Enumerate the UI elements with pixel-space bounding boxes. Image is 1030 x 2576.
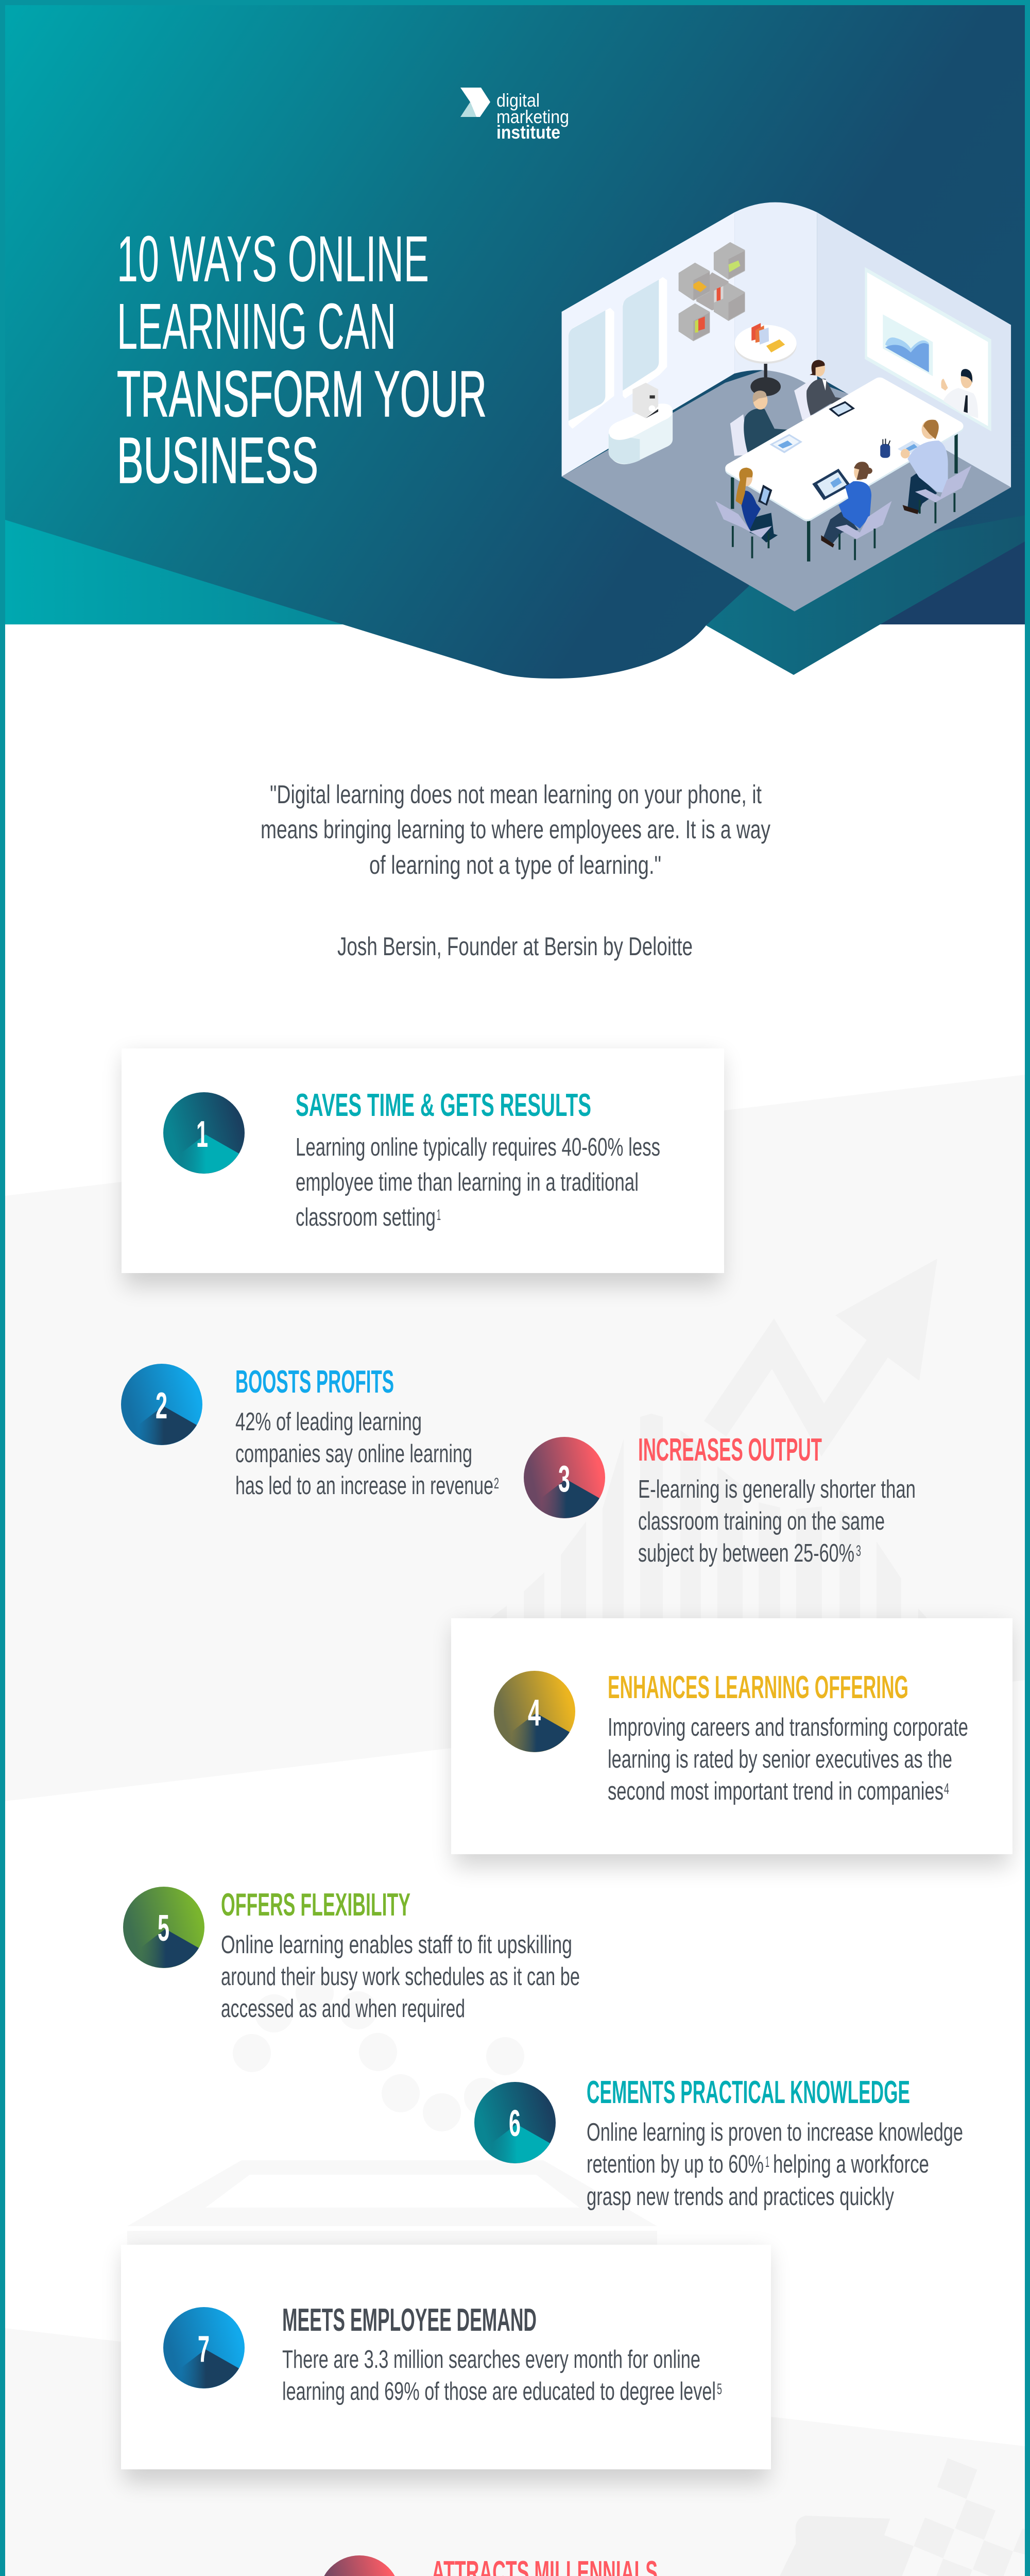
person: man in blue	[821, 462, 872, 548]
number badge 6	[474, 2082, 556, 2163]
quote: "Digital learning does not mean learning on your phone, it	[270, 780, 762, 809]
chair on the right	[915, 466, 972, 523]
item: 5 offers flexibility	[123, 1887, 580, 2023]
number badge 3	[524, 1437, 605, 1518]
hero background	[5, 5, 1025, 679]
text 7	[282, 2346, 722, 2405]
text 5	[221, 1931, 580, 2023]
wall shelves	[679, 242, 745, 341]
text 2: has led to an increase in revenue	[235, 1472, 493, 1500]
text 3	[638, 1476, 916, 1567]
number badge 7: 7	[198, 2329, 210, 2370]
text 3: subject by between 25-60%	[638, 1539, 854, 1567]
text 1: employee time than learning in a traditional	[296, 1168, 639, 1196]
title: TRANSFORM YOUR	[117, 358, 487, 430]
panel: 1 saves time	[122, 1048, 724, 1286]
text 2: companies say online learning	[235, 1440, 472, 1468]
background band: lower	[5, 2328, 1025, 2576]
large tablet	[812, 469, 851, 500]
text 6: grasp new trends and practices quickly	[587, 2183, 894, 2211]
quote: means bringing learning to where employees are. It is a way	[261, 815, 770, 844]
text 1	[296, 1133, 660, 1231]
text 4: 4	[944, 1781, 949, 1798]
room shell	[562, 202, 1011, 612]
text 7: There are 3.3 million searches every month for online	[282, 2346, 700, 2374]
logo: header: institute	[496, 122, 560, 143]
number badge 1	[163, 1092, 245, 1174]
quote	[261, 780, 770, 961]
number badge 2: 2	[156, 1385, 167, 1427]
quote: of learning not a type of learning."	[369, 851, 661, 879]
number badge 8	[319, 2555, 400, 2576]
person: woman in front	[736, 468, 778, 543]
text 2: 2	[494, 1475, 499, 1492]
text 2	[235, 1408, 499, 1500]
heading 3: INCREASES OUTPUT	[638, 1432, 822, 1468]
logo: header	[460, 88, 569, 143]
windows	[569, 277, 667, 429]
meeting table	[732, 383, 957, 516]
text 1: 1	[437, 1207, 441, 1224]
text 5: around their busy work schedules as it can be	[221, 1963, 580, 1991]
back table legs	[731, 434, 958, 562]
person: man on the right	[901, 420, 948, 514]
title: LEARNING CAN	[117, 290, 396, 363]
text 7: learning and 69% of those are educated to degree level	[282, 2378, 716, 2405]
number badge 4: 4	[528, 1692, 541, 1734]
panel: 7 meets employee demand	[121, 2245, 771, 2482]
item: 2 boosts profits	[121, 1364, 499, 1500]
text 6: 1	[765, 2154, 769, 2171]
heading 5: OFFERS FLEXIBILITY	[221, 1887, 410, 1923]
text 5: accessed as and when required	[221, 1995, 465, 2023]
chair front left	[715, 501, 772, 558]
quote: Josh Bersin, Founder at Bersin by Deloitte	[337, 932, 693, 961]
number badge 3: 3	[558, 1459, 570, 1500]
text 1: classroom setting	[296, 1204, 436, 1231]
background band: top	[5, 1075, 1025, 1801]
text 3: E-learning is generally shorter than	[638, 1476, 916, 1503]
text 5: Online learning enables staff to fit upskilling	[221, 1931, 572, 1959]
illustration: isometric meeting room	[562, 202, 1011, 612]
text 3: classroom training on the same	[638, 1507, 885, 1535]
logo: header: digital	[496, 90, 540, 111]
item: 3 increases output	[524, 1432, 916, 1567]
logo: header: marketing	[496, 106, 569, 127]
heading 2: BOOSTS PROFITS	[235, 1364, 394, 1400]
text 3: 3	[856, 1543, 861, 1560]
item: 8 attracts millennials	[319, 2555, 942, 2576]
panel: 4 enhances learning	[451, 1618, 1012, 1867]
number badge 1: 1	[196, 1114, 208, 1155]
number badge 4	[494, 1671, 575, 1752]
presenter	[941, 369, 978, 418]
number badge 5	[123, 1887, 204, 1968]
title	[117, 223, 487, 497]
text 7: 5	[717, 2381, 722, 2398]
number badge 5: 5	[158, 1908, 169, 1949]
text 2: 42% of leading learning	[235, 1408, 422, 1436]
number badge 2	[121, 1364, 202, 1445]
person: man at back left	[730, 391, 793, 456]
watermark: head with chess pattern	[729, 2458, 1030, 2576]
heading 1: SAVES TIME & GETS RESULTS	[296, 1088, 591, 1123]
text 1: Learning online typically requires 40-60% less	[296, 1133, 660, 1161]
round side table with books	[735, 323, 797, 396]
heading 7: MEETS EMPLOYEE DEMAND	[282, 2302, 537, 2338]
title: BUSINESS	[117, 424, 318, 497]
item: 6 cements practical knowledge	[474, 2075, 963, 2211]
chair centre	[835, 501, 892, 560]
title: 10 WAYS ONLINE	[117, 223, 429, 295]
text 6	[587, 2119, 963, 2211]
watermark: rising bar chart with arrow	[490, 1259, 937, 1618]
number badge 7	[163, 2307, 245, 2388]
number badge 6: 6	[509, 2103, 521, 2144]
text 6: retention by up to 60%	[587, 2150, 764, 2178]
text 6: helping a workforce	[773, 2150, 929, 2178]
text 4	[608, 1714, 968, 1805]
person: woman at back	[794, 360, 844, 420]
presentation screen	[865, 267, 991, 431]
watermark: box with falling balls	[127, 1974, 657, 2245]
coffee counter	[609, 383, 673, 464]
tablets on the table	[769, 401, 922, 458]
